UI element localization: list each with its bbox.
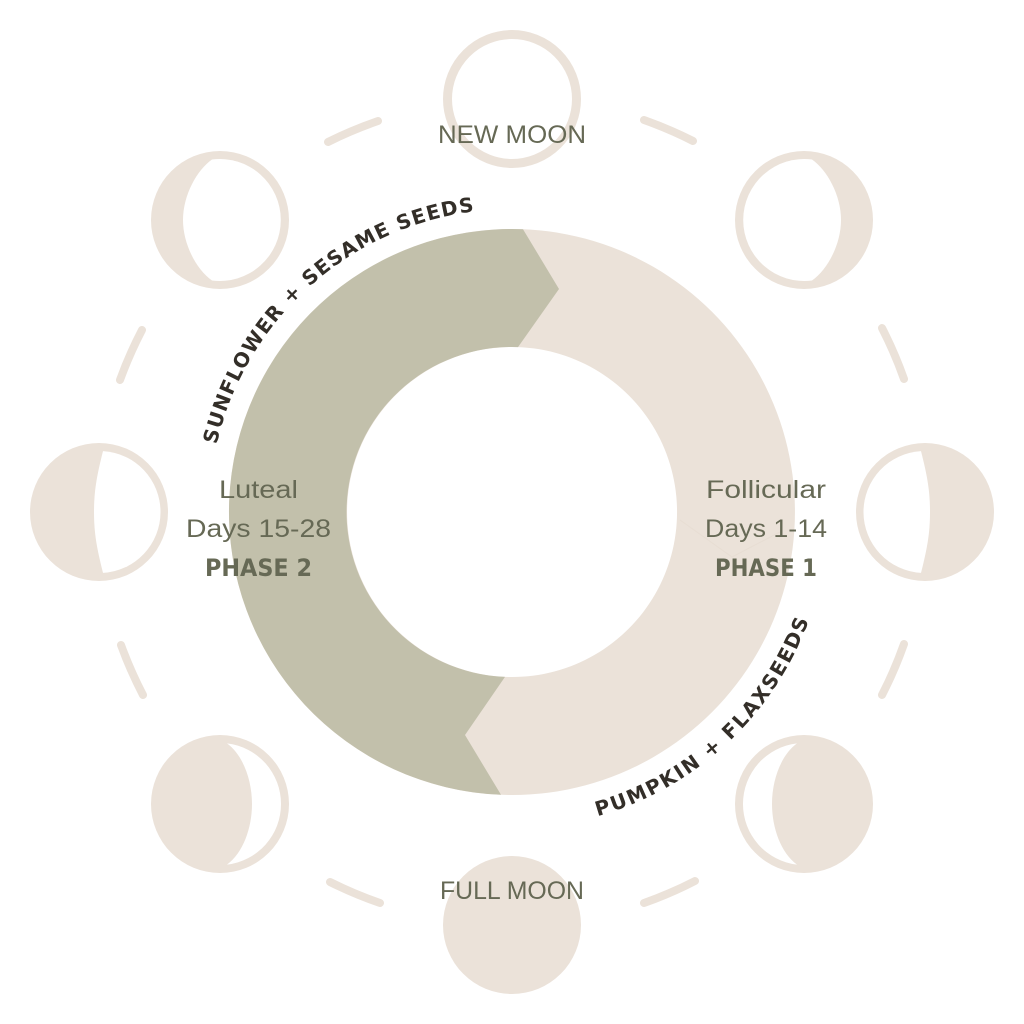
moon: waning crescent upper left [151,151,289,289]
segment: luteal phase [229,229,559,795]
text block: luteal phase: Luteal [219,476,298,504]
text block: luteal phase: PHASE 2 [205,554,312,582]
arc dashes between moons [120,120,904,903]
segment: follicular phase [229,229,795,795]
moon: third quarter left [30,443,168,581]
moon: waning gibbous lower left [151,735,289,873]
moon: new moon [448,34,576,164]
label: new moon: NEW MOON [438,121,586,149]
text block: luteal phase: Days 15-28 [186,515,331,543]
text block: follicular phase: PHASE 1 [715,554,817,582]
text block: follicular phase: Days 1-14 [705,515,827,543]
moon: full moon [443,856,581,994]
moon: waxing crescent upper right [735,151,873,289]
curved label: pumpkin + flaxseeds: PUMPKIN + FLAXSEEDS [595,618,808,816]
text block: follicular phase [705,476,827,582]
moon: waxing gibbous lower right [735,735,873,873]
label: full moon: FULL MOON [440,877,584,905]
text block: follicular phase: Follicular [706,476,826,504]
text block: luteal phase [186,476,331,582]
curved label: sunflower + sesame seeds: SUNFLOWER + SESAME SEEDS [204,198,472,443]
moon: first quarter right [856,443,994,581]
donut chart: cycle phases [229,229,795,795]
